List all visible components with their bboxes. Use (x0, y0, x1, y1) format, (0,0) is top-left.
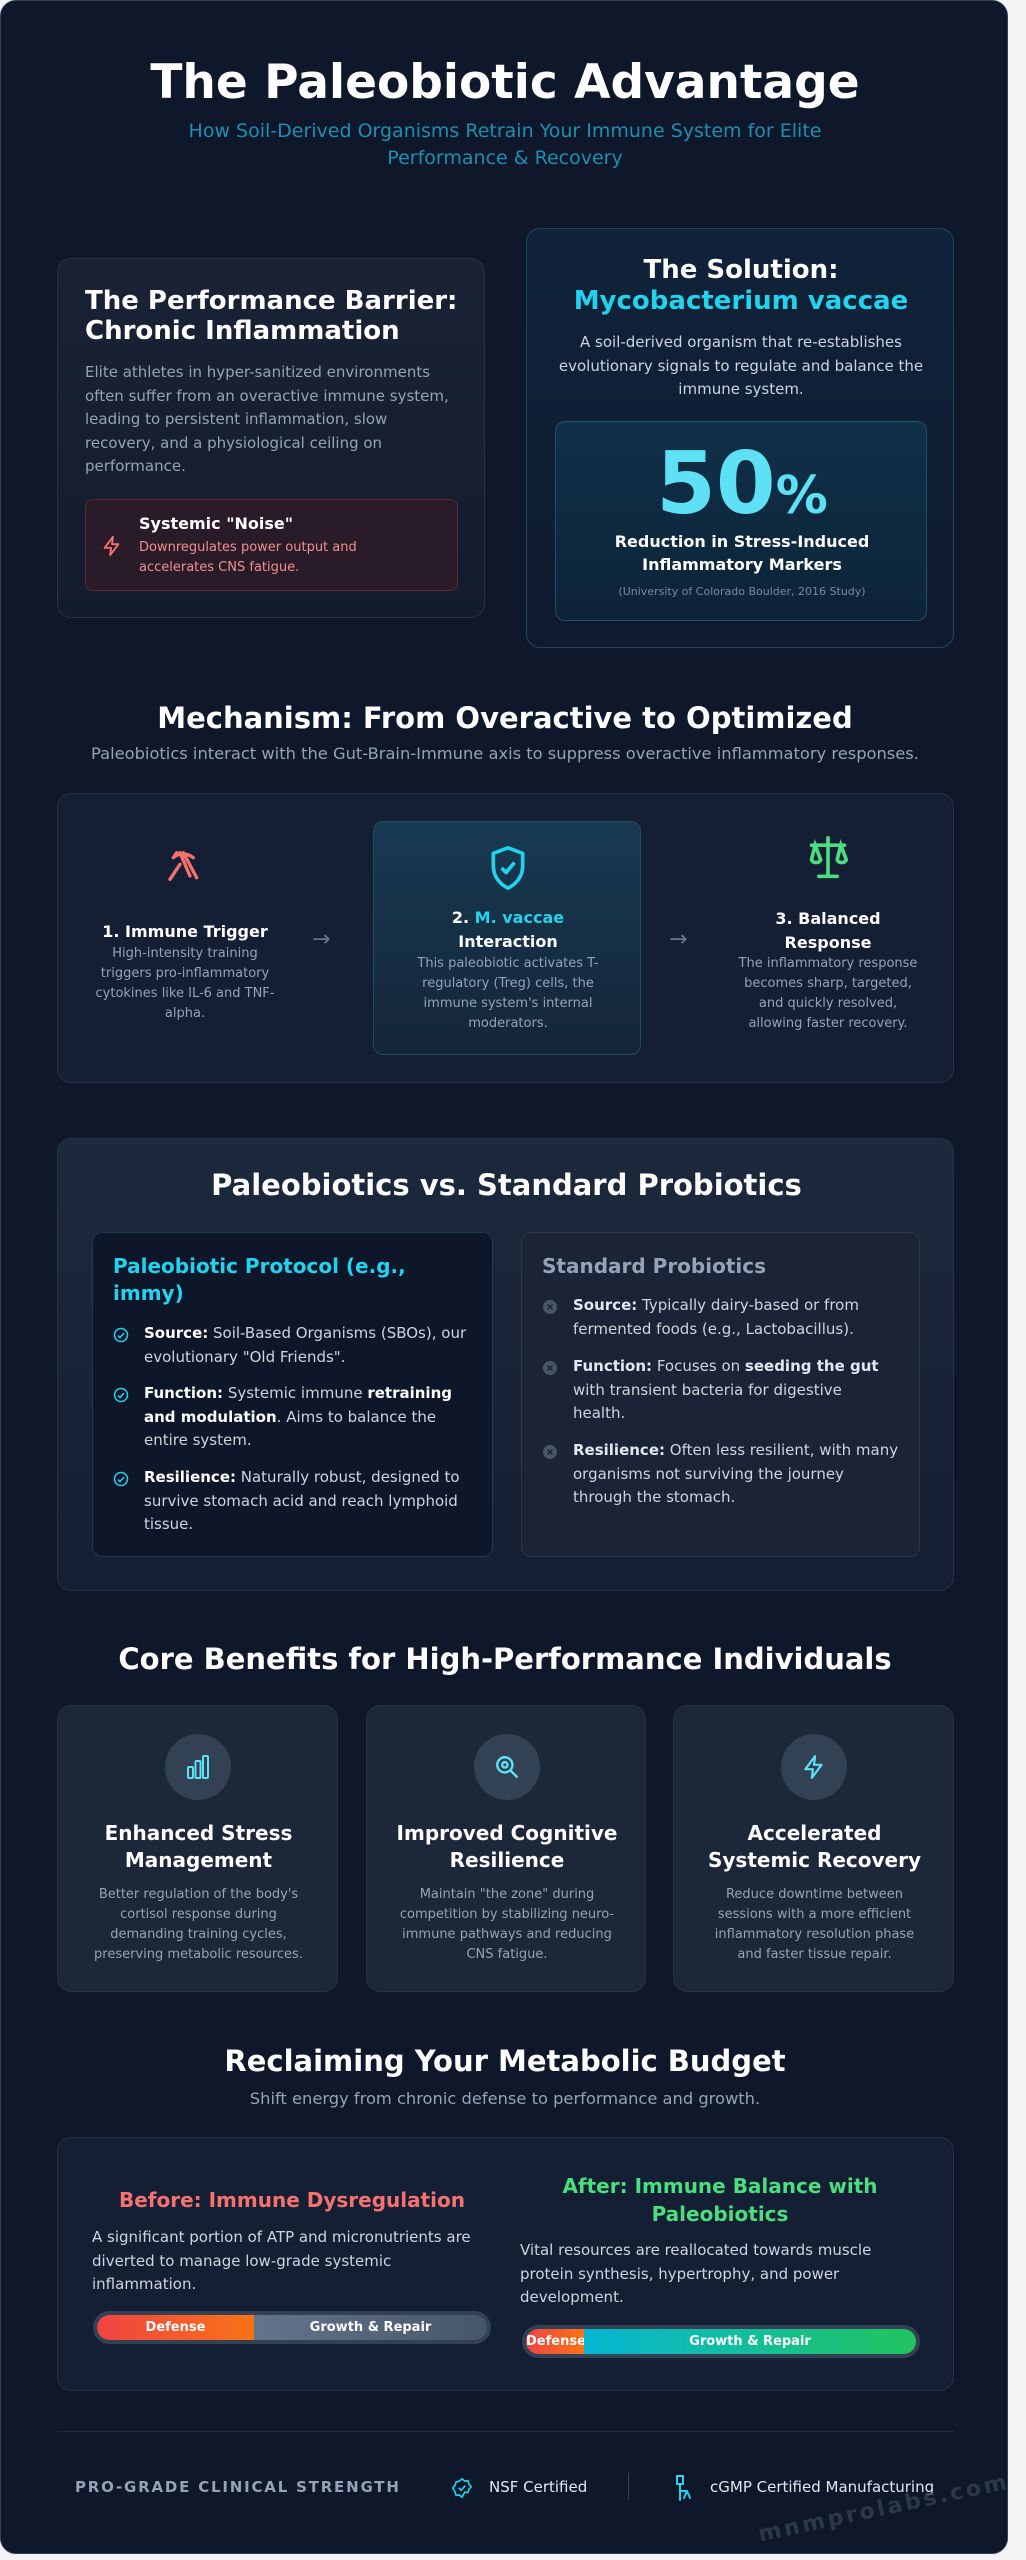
arrow 2: → (669, 927, 687, 952)
after column: After: Immune Balance with Paleobiotics (562, 2174, 878, 2226)
step 3 (738, 836, 917, 1031)
bar: before: Defense (146, 2320, 205, 2335)
panel: comparison (57, 1138, 954, 1591)
sub-panel: standard probiotics (521, 1232, 920, 1557)
bar: before: Growth & Repair (310, 2320, 431, 2335)
icon: shield (492, 846, 524, 890)
icon: lightning (781, 1734, 847, 1800)
subtitle: metabolic: Shift energy from chronic defense to performance and growth. (250, 2089, 760, 2108)
stat box: 50% (555, 421, 927, 621)
step 3: Response (785, 933, 871, 952)
heading: solution: Mycobacterium vaccae (574, 286, 908, 316)
panel: solution (526, 228, 954, 648)
item: resilience: Resilience: Naturally robust, designed to survive stomach acid and reach lymphoid tissue. (144, 1468, 460, 1533)
icon: scale (810, 836, 848, 878)
subtitle: mechanism: Paleobiotics interact with the Gut-Brain-Immune axis to suppress overactive inflammatory responses. (91, 744, 919, 763)
item: source: Source: Typically dairy-based or from fermented foods (e.g., Lactobacillus). (573, 1296, 859, 1338)
step 2: Interaction (458, 932, 558, 951)
footer: certifications: PRO-GRADE CLINICAL STRENGTH (75, 2478, 401, 2496)
before column (92, 2188, 491, 2344)
icon: cgmp (676, 2475, 691, 2501)
item: function: Function: Systemic immune retraining and modulation. Aims to balance the entire system. (144, 1384, 452, 1449)
bar: before (93, 2311, 491, 2344)
item: source: Source: Soil-Based Organisms (SBOs), our evolutionary "Old Friends". (144, 1324, 466, 1366)
footer: certifications: NSF Certified (489, 2478, 587, 2496)
step 1: 1. Immune Trigger (102, 922, 268, 941)
heading: mechanism: Mechanism: From Overactive to Optimized (157, 701, 853, 735)
heading: standard: Standard Probiotics (542, 1254, 766, 1278)
callout: systemic noise: Downregulates power output and accelerates CNS fatigue. (139, 540, 357, 575)
callout: systemic noise: Systemic "Noise" (139, 514, 293, 533)
benefit card: cognitive: Improved Cognitive (397, 1821, 617, 1845)
step 1 (96, 850, 274, 1021)
benefit card: stress (57, 1705, 338, 1992)
stat box: 50%: Reduction in Stress-Induced (615, 532, 869, 551)
text: solution body: A soil-derived organism that re-establishes evolutionary signals to regulate and balance the immune system. (559, 333, 923, 398)
panel: before/after (57, 2137, 954, 2391)
heading: protocol: Paleobiotic Protocol (e.g., immy) (113, 1254, 406, 1305)
sub-panel: paleobiotic protocol (92, 1232, 493, 1557)
text: barrier body: Elite athletes in hyper-sanitized environments often suffer from an overactive immune system, leading to persistent inflammation, slow recovery, and a physiological ceiling on performance. (85, 363, 449, 475)
step 2: This paleobiotic activates T-regulatory (Treg) cells, the immune system's internal moderators. (417, 956, 599, 1031)
stat box: 50%: (University of Colorado Boulder, 2016 Study) (618, 585, 866, 598)
bar: after: Growth & Repair (689, 2334, 811, 2349)
heading: solution: The Solution: (643, 255, 839, 285)
step 3: 3. Balanced (775, 909, 881, 928)
item: function: Function: Focuses on seeding the gut with transient bacteria for digestive health. (573, 1357, 879, 1422)
callout: systemic noise (85, 499, 458, 591)
stat box: 50%: Inflammatory Markers (642, 555, 842, 574)
footer: certifications (75, 2473, 934, 2501)
icon: search (474, 1734, 540, 1800)
benefit card: recovery: Accelerated (748, 1821, 881, 1845)
heading: barrier: The Performance Barrier: Chronic Inflammation (85, 286, 457, 346)
benefit card: stress: Better regulation of the body's cortisol response during demanding training cycles, preserving metabolic resources. (94, 1887, 303, 1962)
benefit card: recovery: Reduce downtime between sessions with a more efficient inflammatory resolution phase and faster tissue repair. (715, 1887, 914, 1962)
footer: certifications: cGMP Certified Manufacturing (710, 2478, 934, 2496)
subtitle: How Soil-Derived Organisms Retrain Your Immune System for Elite Performance & Recovery (189, 120, 821, 169)
benefit card: recovery (673, 1705, 954, 1992)
benefit card: cognitive: Resilience (450, 1848, 564, 1872)
bar: after (522, 2325, 920, 2358)
title: The Paleobiotic Advantage (150, 55, 860, 110)
benefit card: cognitive: Maintain "the zone" during competition by stabilizing neuro-immune pathways and reducing CNS fatigue. (400, 1887, 614, 1962)
after column: Vital resources are reallocated towards muscle protein synthesis, hypertrophy, and power development. (520, 2241, 871, 2306)
benefit card: cognitive (366, 1705, 646, 1992)
arrow 1: → (312, 927, 330, 952)
heading: comparison: Paleobiotics vs. Standard Probiotics (211, 1168, 802, 1202)
before column: Before: Immune Dysregulation (119, 2188, 465, 2212)
watermark: mnmprolabs.com (756, 2470, 1008, 2547)
step 2 (373, 821, 641, 1055)
heading: core benefits: Core Benefits for High-Performance Individuals (118, 1642, 892, 1676)
benefit card: stress: Management (125, 1848, 272, 1872)
benefit card: recovery: Systemic Recovery (708, 1848, 921, 1872)
step 1: High-intensity training triggers pro-inflammatory cytokines like IL-6 and TNF-alpha. (96, 946, 274, 1021)
stat box: 50%: 50% (656, 434, 828, 534)
icon: lightning (104, 536, 120, 556)
benefit card: stress: Enhanced Stress (105, 1821, 292, 1845)
icon: trigger (168, 850, 198, 882)
heading: solution (574, 255, 908, 316)
step 2: 2. M. vaccae (452, 908, 564, 927)
step 3: The inflammatory response becomes sharp, targeted, and quickly resolved, allowing faster recovery. (739, 956, 917, 1031)
before column: A significant portion of ATP and micronutrients are diverted to manage low-grade systemic inflammation. (92, 2228, 471, 2293)
icon: nsf (452, 2478, 472, 2498)
after column (520, 2174, 920, 2358)
panel: mechanism flow (57, 793, 954, 1083)
panel: performance barrier (57, 258, 485, 618)
heading: metabolic budget: Reclaiming Your Metabolic Budget (224, 2044, 786, 2078)
icon: bar chart (165, 1734, 231, 1800)
item: resilience: Resilience: Often less resilient, with many organisms not surviving the journey through the stomach. (573, 1441, 898, 1506)
